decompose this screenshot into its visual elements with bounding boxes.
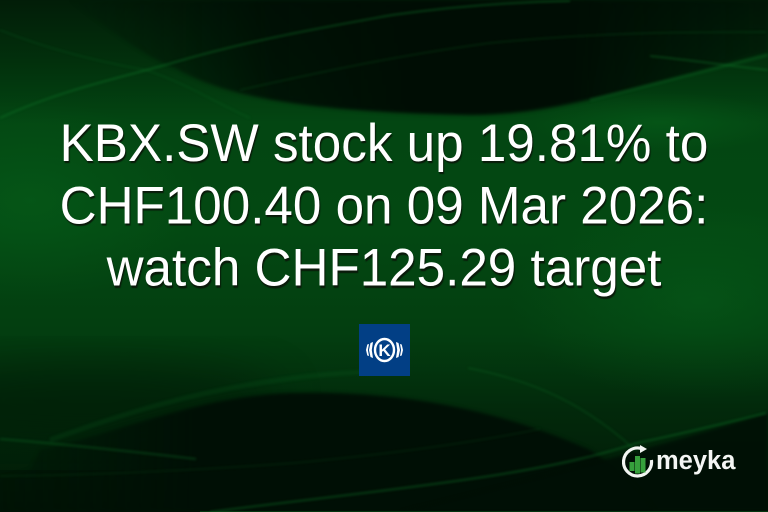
- icon: meyka chart circle: [622, 445, 654, 478]
- title: KBX.SW stock up 19.81% to: [60, 113, 708, 172]
- bottom fade: [0, 470, 768, 512]
- brand name: meyka: [656, 447, 735, 475]
- bottom edge line: [200, 511, 768, 512]
- left dim area above lower wave: [0, 360, 280, 440]
- brand: meyka logo: [622, 445, 736, 478]
- title: [60, 113, 708, 300]
- bottom dark wave: [0, 393, 655, 512]
- icon: company logo: [359, 324, 410, 376]
- icon: company logo: K: [378, 341, 391, 360]
- title: watch CHF125.29 target: [107, 238, 661, 297]
- title: CHF100.40 on 09 Mar 2026:: [60, 175, 708, 235]
- top dark wave: [70, 0, 768, 115]
